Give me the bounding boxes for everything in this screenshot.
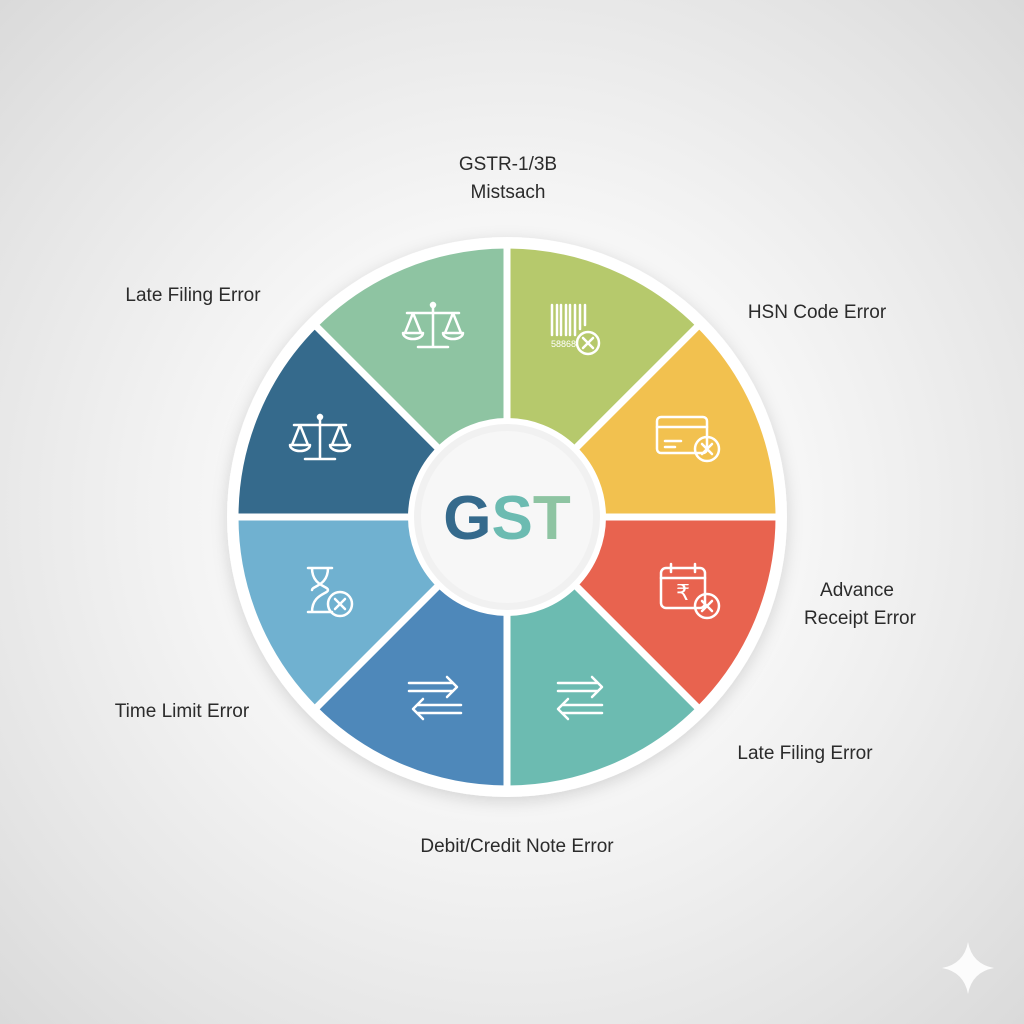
icon: arrows right segment: [558, 677, 602, 719]
center hub: GST: [443, 484, 571, 553]
labels: [115, 154, 917, 857]
icon: barcode: [551, 305, 599, 354]
icon: arrows left segment: [409, 677, 461, 719]
wheel: [227, 237, 787, 797]
label: HSN: HSN Code Error: [748, 302, 887, 323]
label: late filing right: Late Filing Error: [737, 743, 873, 764]
icon: scale left: [290, 415, 350, 459]
label: GSTR-1/3B: GSTR-1/3B: [459, 154, 557, 175]
icon: calendar rupee: ₹: [676, 581, 690, 606]
icon: sparkle: [942, 942, 994, 994]
icon: card: [657, 417, 719, 461]
icon: scale top-left: [403, 303, 463, 347]
label: time limit: Time Limit Error: [115, 701, 250, 722]
label: debit credit: Debit/Credit Note Error: [420, 836, 614, 857]
icon: hourglass: [308, 568, 352, 616]
label: GSTR-1/3B: Mistsach: [471, 182, 545, 203]
label: late filing left: Late Filing Error: [125, 285, 261, 306]
icon: calendar rupee: [661, 564, 719, 618]
label: advance receipt: Receipt Error: [804, 608, 917, 629]
label: advance receipt: Advance: [820, 580, 894, 601]
icon: barcode: 58868: [551, 339, 576, 349]
center hub: [411, 421, 603, 613]
